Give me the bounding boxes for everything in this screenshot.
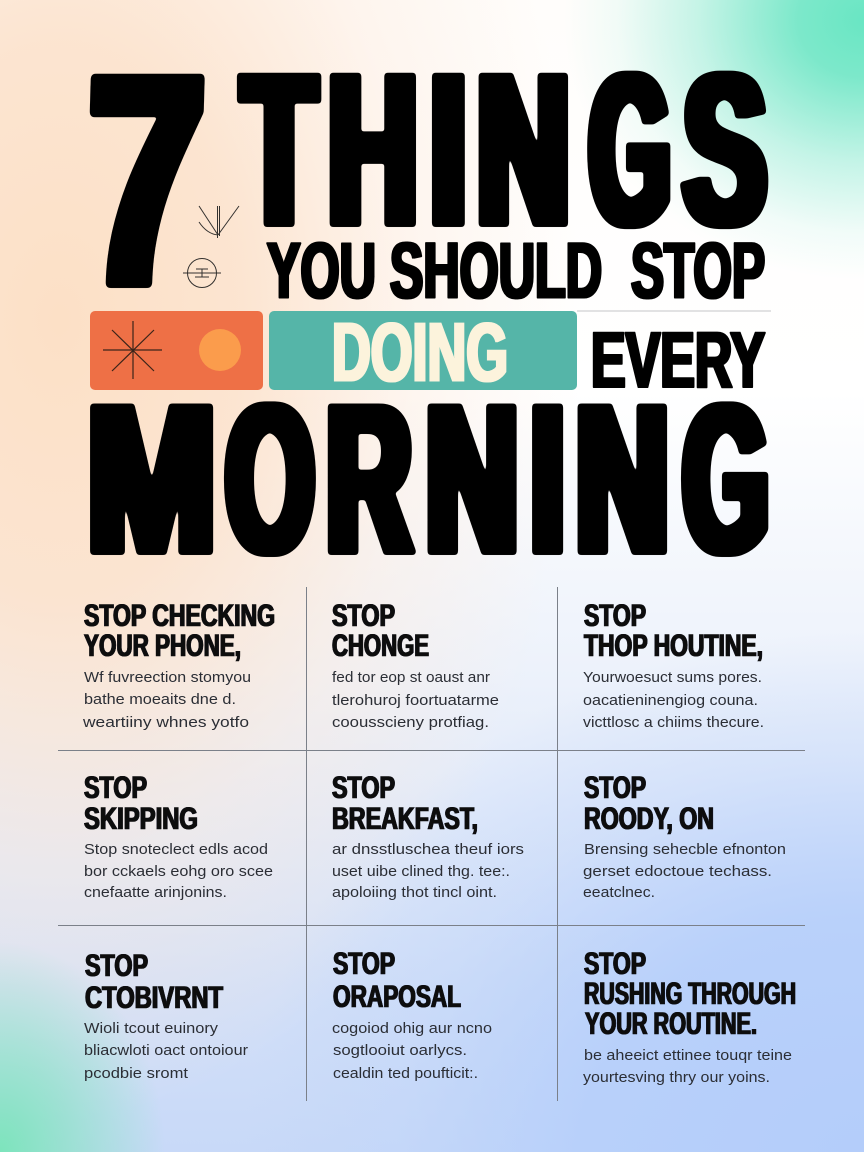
- cell 1: stop checking your phone: STOP CHECKING: [84, 597, 275, 633]
- cell 8: stop oraposal: cealdin ted poufticit:.: [333, 1065, 478, 1082]
- cell 6: stop roody on: STOP: [584, 769, 646, 805]
- title word: MORNING: O: [226, 362, 314, 596]
- title word: MORNING: N: [576, 362, 669, 596]
- cell 2: stop chonge: CHONGE: [332, 627, 429, 663]
- cell 3: stop thop houtine: THOP HOUTINE,: [584, 627, 763, 663]
- cell 5: stop breakfast: ar dnsstluschea theuf iors: [332, 841, 524, 858]
- title word: MORNING: G: [683, 362, 768, 596]
- cell 8: stop oraposal: cogoiod ohig aur ncno: [332, 1020, 492, 1037]
- cell 8: stop oraposal: [332, 945, 492, 1082]
- icon: circle emblem: [183, 258, 221, 288]
- cell 2: stop chonge: tlerohuroj foortuatarme: [332, 692, 499, 709]
- cell 1: stop checking your phone: YOUR PHONE,: [84, 627, 241, 663]
- title word: MORNING: N: [426, 362, 518, 596]
- cell 6: stop roody on: eeatclnec.: [583, 884, 655, 901]
- cell 8: stop oraposal: ORAPOSAL: [333, 978, 461, 1014]
- cell 7: stop ctobivrnt: CTOBIVRNT: [85, 979, 223, 1015]
- cell 9: stop rushing through your routine: be aheeict ettinee touqr teine: [584, 1047, 792, 1064]
- cell 7: stop ctobivrnt: [84, 947, 248, 1082]
- cell 6: stop roody on: gerset edoctoue techass.: [583, 863, 772, 880]
- title word: every: EVERY: [591, 315, 765, 404]
- icon: sun circle: [199, 329, 241, 371]
- cell 2: stop chonge: fed tor eop st oaust anr: [332, 669, 490, 686]
- orange panel with star and sun: [90, 311, 263, 390]
- title word: THINGS: [242, 30, 766, 270]
- cell 8: stop oraposal: sogtlooiut oarlycs.: [333, 1042, 467, 1059]
- title word: MORNING: [87, 362, 768, 596]
- cell 7: stop ctobivrnt: Wioli tcout euinory: [84, 1020, 219, 1037]
- title word: MORNING: R: [327, 362, 411, 596]
- title word: THINGS: I: [430, 30, 466, 270]
- cell 8: stop oraposal: STOP: [333, 945, 395, 981]
- cell 6: stop roody on: ROODY, ON: [584, 800, 714, 836]
- cell 5: stop breakfast: [332, 769, 524, 901]
- cell 4: stop skipping: SKIPPING: [84, 800, 198, 836]
- title word: stop: STOP: [631, 226, 765, 314]
- cell 4: stop skipping: cnefaatte arinjonins.: [84, 884, 227, 901]
- cell 1: stop checking your phone: Wf fuvreection stomyou: [84, 669, 251, 686]
- cell 5: stop breakfast: uset uibe clined thg. tee:.: [332, 863, 510, 880]
- title word: THINGS: N: [477, 30, 570, 270]
- cell 1: stop checking your phone: weartiiny whnes yotfo: [82, 714, 249, 731]
- title word: MORNING: I: [531, 362, 564, 596]
- teal highlight panel: [269, 306, 577, 398]
- cell 3: stop thop houtine: victtlosc a chiims thecure.: [583, 714, 764, 731]
- cell 4: stop skipping: STOP: [84, 769, 147, 805]
- cell 6: stop roody on: [583, 769, 786, 901]
- cell 4: stop skipping: Stop snoteclect edls acod: [84, 841, 268, 858]
- title word: THINGS: G: [590, 30, 670, 270]
- cell 3: stop thop houtine: [583, 597, 764, 731]
- cell 3: stop thop houtine: STOP: [584, 597, 646, 633]
- cell 1: stop checking your phone: bathe moeaits dne d.: [84, 691, 236, 708]
- cell 5: stop breakfast: apoloiing thot tincl oint.: [332, 884, 497, 901]
- cell 2: stop chonge: STOP: [332, 597, 395, 633]
- title word: THINGS: H: [328, 30, 417, 270]
- title block: [83, 14, 768, 597]
- title line: you should: YOU SHOULD: [267, 226, 602, 314]
- cell 9: stop rushing through your routine: yourtesving thry our yoins.: [583, 1069, 770, 1086]
- icon: plant sprout: [199, 206, 239, 238]
- cell 9: stop rushing through your routine: [583, 945, 796, 1086]
- numeral 7: 7: [83, 14, 207, 346]
- cell 1: stop checking your phone: [82, 597, 275, 731]
- cell 7: stop ctobivrnt: bliacwloti oact ontoiour: [84, 1042, 248, 1059]
- cell 6: stop roody on: Brensing sehecble efnonton: [584, 841, 786, 858]
- cell 5: stop breakfast: STOP: [332, 769, 395, 805]
- cell 3: stop thop houtine: Yourwoesuct sums pores.: [583, 669, 762, 686]
- cell 2: stop chonge: coousscieny protfiag.: [332, 714, 489, 731]
- title word: THINGS: T: [242, 30, 316, 270]
- cell 9: stop rushing through your routine: STOP: [584, 945, 646, 981]
- cell 3: stop thop houtine: oacatieninengiog couna.: [583, 692, 758, 709]
- cell 4: stop skipping: [84, 769, 273, 901]
- cell 5: stop breakfast: BREAKFAST,: [332, 800, 478, 836]
- icon: starburst: [103, 321, 162, 379]
- highlighted word: doing: DOING: [332, 306, 508, 398]
- cell 7: stop ctobivrnt: STOP: [85, 947, 148, 983]
- cell 4: stop skipping: bor cckaels eohg oro scee: [84, 863, 273, 880]
- cell 7: stop ctobivrnt: pcodbie sromt: [84, 1065, 189, 1082]
- cell 2: stop chonge: [332, 597, 499, 731]
- title word: MORNING: M: [87, 362, 216, 596]
- title word: THINGS: S: [684, 30, 766, 270]
- cell 9: stop rushing through your routine: YOUR ROUTINE.: [585, 1005, 757, 1041]
